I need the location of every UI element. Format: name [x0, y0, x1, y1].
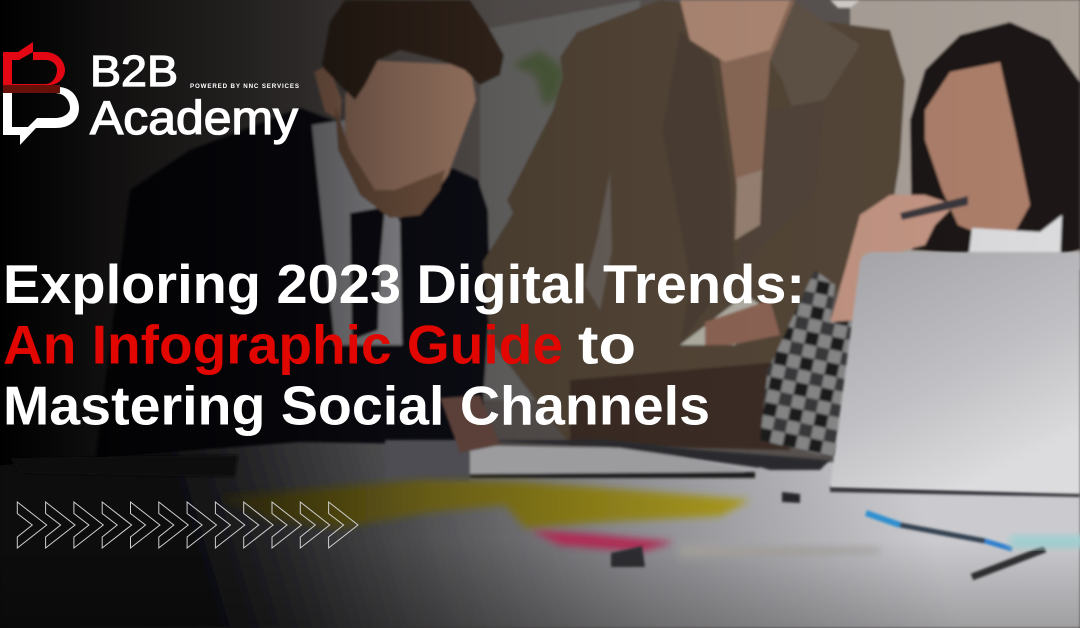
woman forearm and note	[680, 295, 770, 345]
blazer lapels	[662, 30, 735, 345]
table with papers, blurred	[0, 395, 1080, 628]
right woman hand and pen	[830, 195, 955, 322]
yellow note	[220, 480, 750, 528]
woman blazer	[483, 0, 905, 450]
man ear and face	[314, 65, 342, 120]
title line 2: to	[578, 314, 636, 376]
right woman collar	[968, 215, 1062, 262]
background wall	[480, 0, 640, 400]
right woman hair	[910, 22, 1080, 262]
right woman jacket	[760, 270, 858, 460]
woman neck and face	[680, 0, 795, 190]
title line 2	[3, 314, 636, 376]
title line 3: Mastering Social Channels	[3, 374, 710, 436]
title line 1: Exploring 2023 Digital Trends:	[3, 253, 805, 315]
laptop	[830, 252, 1080, 494]
man hair	[322, 0, 504, 100]
highlighted phrase: An Infographic Guide	[3, 314, 563, 376]
tagline: POWERED BY NNC SERVICES	[190, 83, 299, 90]
wordmark: Academy: Academy	[90, 91, 299, 144]
pink note	[530, 530, 675, 552]
logo: B2B Academy	[3, 42, 299, 145]
wordmark: B2B: B2B	[90, 47, 178, 96]
right woman face	[925, 62, 1030, 236]
blazer gap	[585, 172, 612, 310]
icon: speech-bubble B mark	[3, 42, 79, 145]
man suit	[95, 108, 490, 460]
